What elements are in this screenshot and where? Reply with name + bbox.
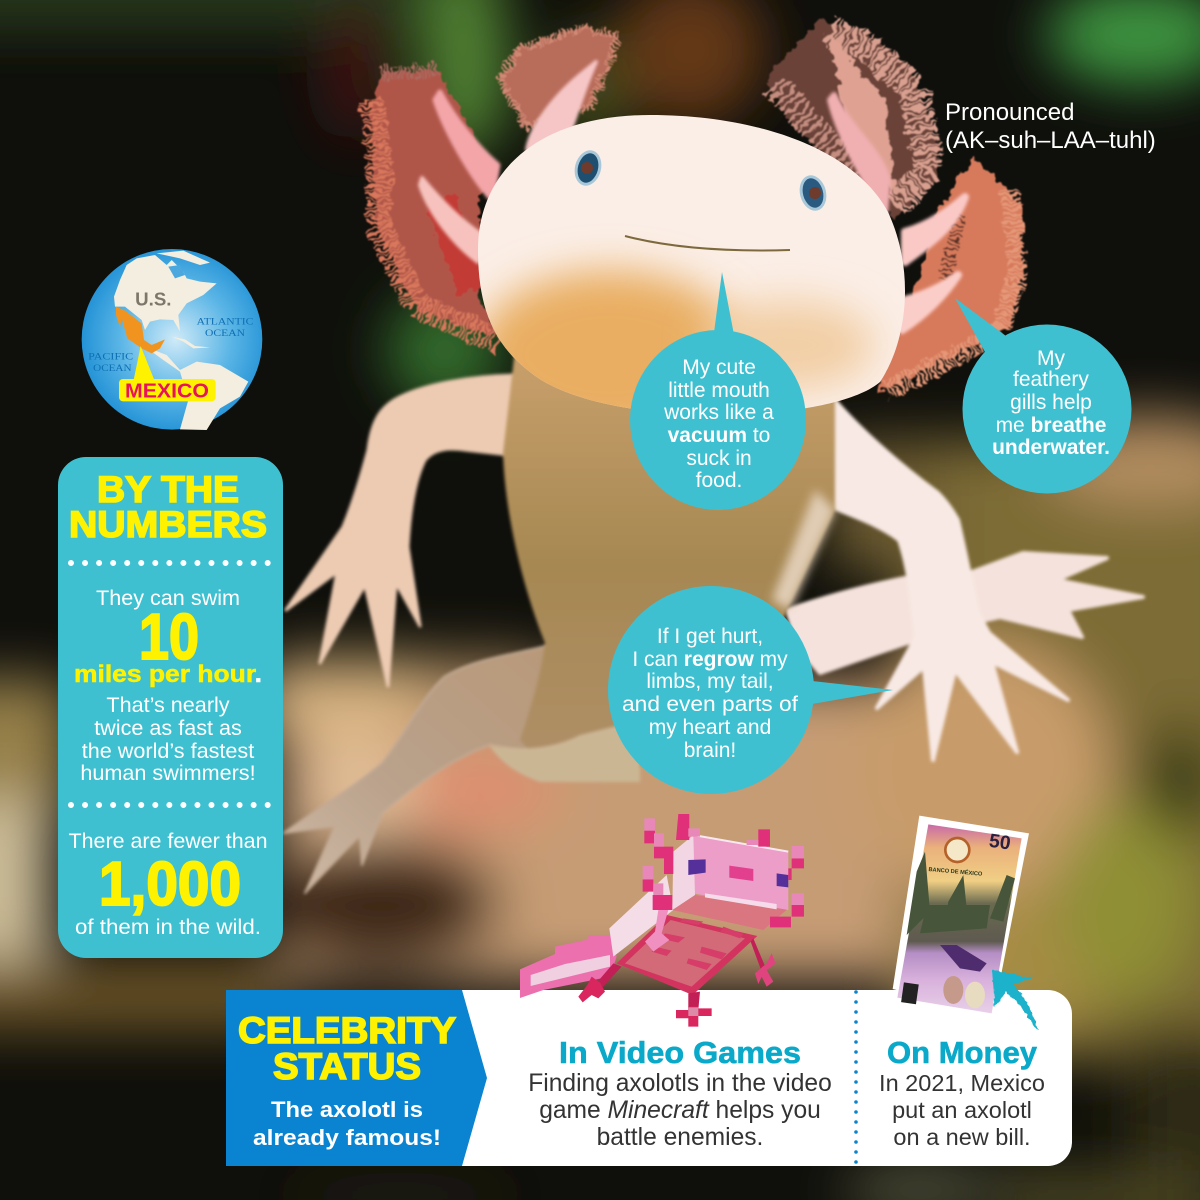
heading: NUMBERS: [69, 504, 267, 545]
panel: celebrity status banner: The axolotl is: [271, 1097, 423, 1122]
fact: population: 1,000: [99, 850, 241, 919]
gills: right side: [764, 20, 1023, 393]
mouth patch: [729, 866, 753, 881]
text block: in video games: game Minecraft helps you: [539, 1097, 821, 1124]
globe map: [82, 249, 262, 430]
underside stripes: [652, 918, 743, 970]
front foot: [676, 1007, 712, 1027]
U.S. label: U.S.: [135, 289, 171, 310]
banknote: 50: [988, 831, 1012, 855]
heading: [69, 469, 267, 545]
Atlantic Ocean second line: OCEAN: [205, 328, 245, 339]
Central America and South America: [145, 347, 248, 430]
head front: [693, 835, 788, 910]
dark gills: [643, 814, 804, 927]
speech bubble: regrow: If I get hurt,: [657, 625, 763, 648]
Pacific Ocean second line: OCEAN: [93, 363, 132, 374]
head underside: [672, 895, 788, 930]
back legs: [593, 938, 767, 1010]
left eye: [571, 147, 605, 189]
banknote: BANCO DE MÉXICO: [928, 865, 983, 878]
Mexico callout pointer: [133, 346, 155, 382]
limb: upper right arm: [800, 397, 1068, 760]
panel: by the numbers: [58, 457, 283, 958]
panel: celebrity status banner: CELEBRITY: [238, 1010, 456, 1051]
text block: on money: on a new bill.: [893, 1124, 1031, 1150]
panel: celebrity status banner: STATUS: [273, 1046, 421, 1087]
fact: swim speed: the world’s fastest: [82, 738, 254, 763]
gill stalks: left side: [420, 62, 596, 262]
body underside: [617, 915, 757, 995]
head: [478, 115, 905, 408]
pronunciation note: [945, 99, 1156, 154]
gills: left side: [371, 27, 619, 342]
Atlantic Ocean label: ATLANTIC: [197, 317, 253, 328]
speech bubble: regrow: limbs, my tail,: [646, 670, 774, 693]
speech bubble: regrow: I can regrow my: [632, 648, 788, 671]
speech bubble: mouth: little mouth: [668, 379, 770, 402]
front leg: [645, 910, 669, 952]
fact: swim speed: twice as fast as: [94, 715, 242, 740]
text block: on money: [879, 1035, 1045, 1150]
panel: celebrity status white card: [440, 990, 1072, 1166]
pronunciation note: Pronounced: [945, 99, 1074, 126]
back left foot: [578, 977, 605, 1002]
text block: on money: In 2021, Mexico: [879, 1070, 1045, 1096]
speech bubble: mouth: vacuum to: [668, 424, 770, 447]
fact: swim speed: That’s nearly: [106, 692, 230, 717]
Arctic islands: [157, 251, 210, 265]
pronunciation note: (AK–suh–LAA–tuhl): [945, 127, 1156, 154]
speech bubble: mouth: food.: [696, 469, 742, 492]
mouth: [625, 236, 790, 250]
Caribbean islands: [172, 337, 210, 348]
limbs: [284, 375, 1143, 893]
fact: population: There are fewer than: [68, 828, 268, 853]
body: [503, 350, 835, 780]
lower pelvis patch: [489, 720, 640, 782]
speech bubble: gills: feathery: [1013, 368, 1089, 391]
head chin shading: [475, 270, 875, 440]
fact: swim speed: miles per hour .: [74, 661, 262, 688]
speech bubble: regrow: [608, 586, 893, 794]
text block: in video games: Finding axolotls in the video: [528, 1070, 832, 1097]
panel: celebrity status banner: [226, 990, 487, 1166]
speech bubble: gills: My: [1037, 347, 1065, 370]
Mexico shape: [116, 307, 165, 353]
speech bubble: mouth: [630, 272, 806, 510]
right eye: [796, 172, 830, 214]
head lower highlight: [705, 893, 777, 909]
North America landmass: [114, 255, 217, 332]
speech bubble: gills: [955, 298, 1132, 494]
Hudson Bay: [168, 265, 185, 278]
back right foot: [755, 953, 776, 987]
Pacific Ocean label: PACIFIC: [88, 351, 133, 362]
fact: population: [68, 828, 268, 939]
limb: lower right leg: [787, 553, 1143, 673]
gill stalks: right side: [830, 95, 965, 330]
head top edge: [693, 835, 788, 852]
heading: BY THE: [97, 469, 239, 510]
fact: swim speed: [74, 585, 262, 785]
text block: in video games: battle enemies.: [597, 1124, 763, 1151]
pale gills: [643, 818, 804, 905]
banknote: [893, 816, 1029, 1014]
fact: swim speed: They can swim: [96, 585, 240, 610]
speech bubble: mouth: works like a: [663, 401, 774, 424]
head left side: [672, 835, 695, 910]
fact: population: of them in the wild.: [75, 914, 261, 939]
speech bubble: gills: me breathe: [996, 414, 1106, 437]
text block: on money: put an axolotl: [892, 1097, 1032, 1123]
eyes: [688, 859, 788, 887]
speech bubble: regrow: and even parts of: [622, 693, 798, 716]
limb: lower left leg: [284, 645, 560, 893]
panel: celebrity status banner: already famous!: [253, 1125, 441, 1150]
speech bubble: regrow: my heart and: [649, 716, 771, 739]
minecraft axolotl: [520, 814, 804, 1027]
belly right highlight: [772, 490, 835, 610]
speech bubble: mouth: suck in: [686, 447, 752, 470]
text block: in video games: [528, 1035, 832, 1151]
limb: upper left arm: [286, 375, 525, 686]
speech bubble: mouth: My cute: [682, 356, 756, 379]
tail: [520, 935, 617, 998]
body side: [609, 875, 673, 957]
speech bubble: gills: gills help: [1010, 391, 1092, 414]
text block: on money: On Money: [887, 1035, 1038, 1070]
Mexico label: MEXICO: [125, 380, 209, 403]
arrow pointing to banknote: [992, 970, 1038, 1032]
fact: swim speed: 10: [139, 600, 199, 673]
axolotl photo: [284, 20, 1143, 893]
fact: swim speed: human swimmers!: [80, 760, 256, 785]
speech bubble: regrow: brain!: [684, 739, 736, 762]
text block: in video games: In Video Games: [559, 1035, 801, 1070]
speech bubble: gills: underwater.: [992, 436, 1110, 459]
